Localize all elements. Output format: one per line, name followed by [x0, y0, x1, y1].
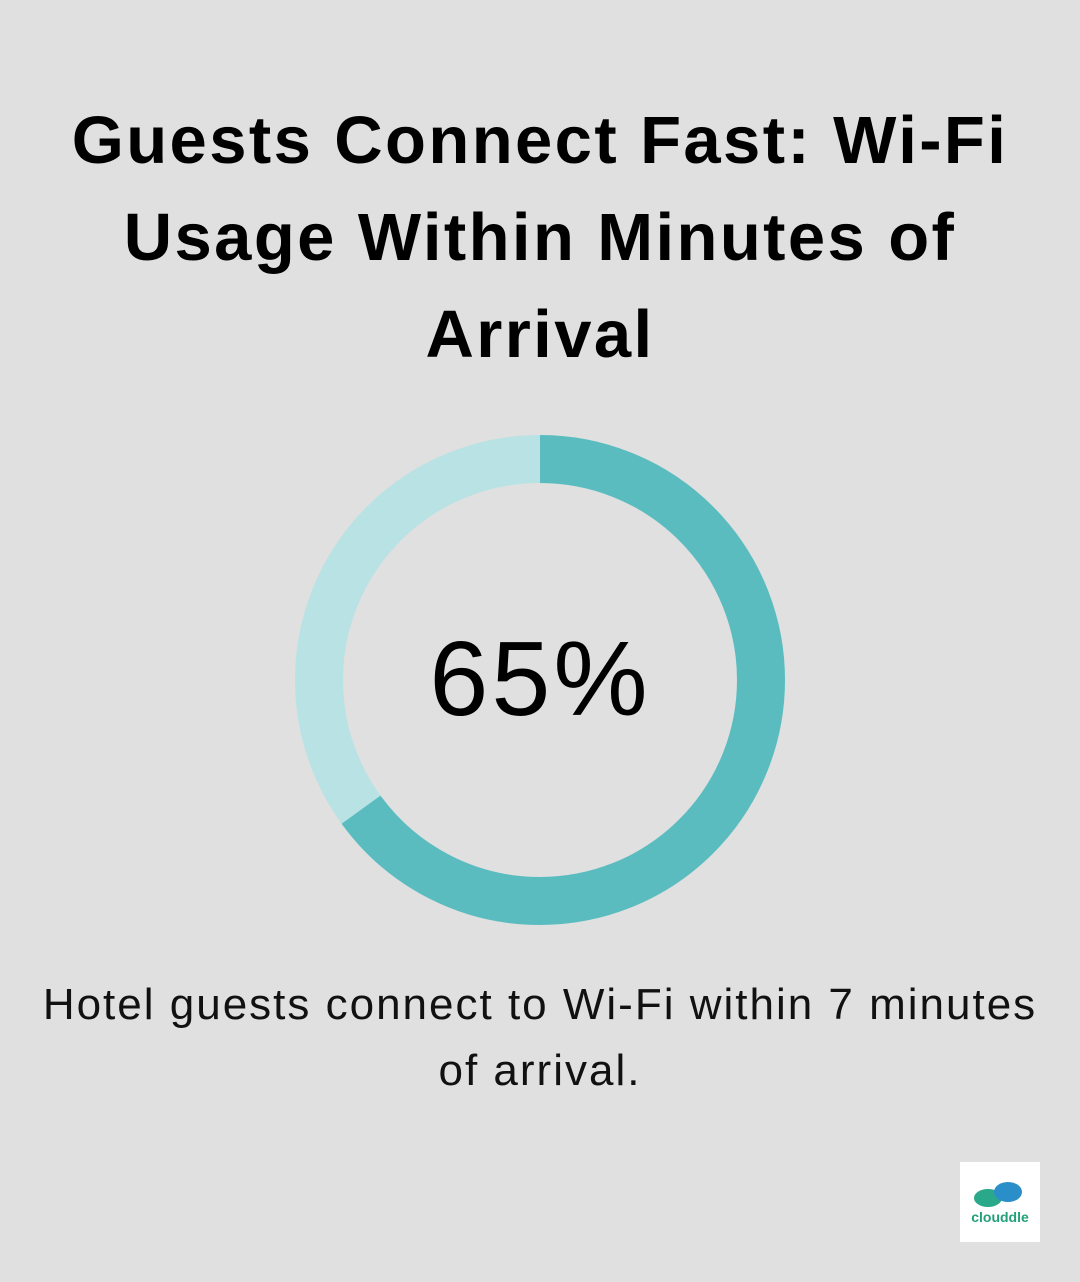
title: Usage Within Minutes of — [124, 200, 956, 275]
title: Arrival — [425, 297, 655, 372]
logo: clouddle — [971, 1209, 1029, 1225]
donut chart: 65% — [429, 620, 651, 738]
caption — [43, 980, 1037, 1095]
caption: of arrival. — [439, 1046, 641, 1095]
caption: Hotel guests connect to Wi-Fi within 7 minutes — [43, 980, 1037, 1029]
title — [72, 103, 1008, 372]
logo — [960, 1162, 1040, 1242]
title: Guests Connect Fast: Wi-Fi — [72, 103, 1008, 178]
